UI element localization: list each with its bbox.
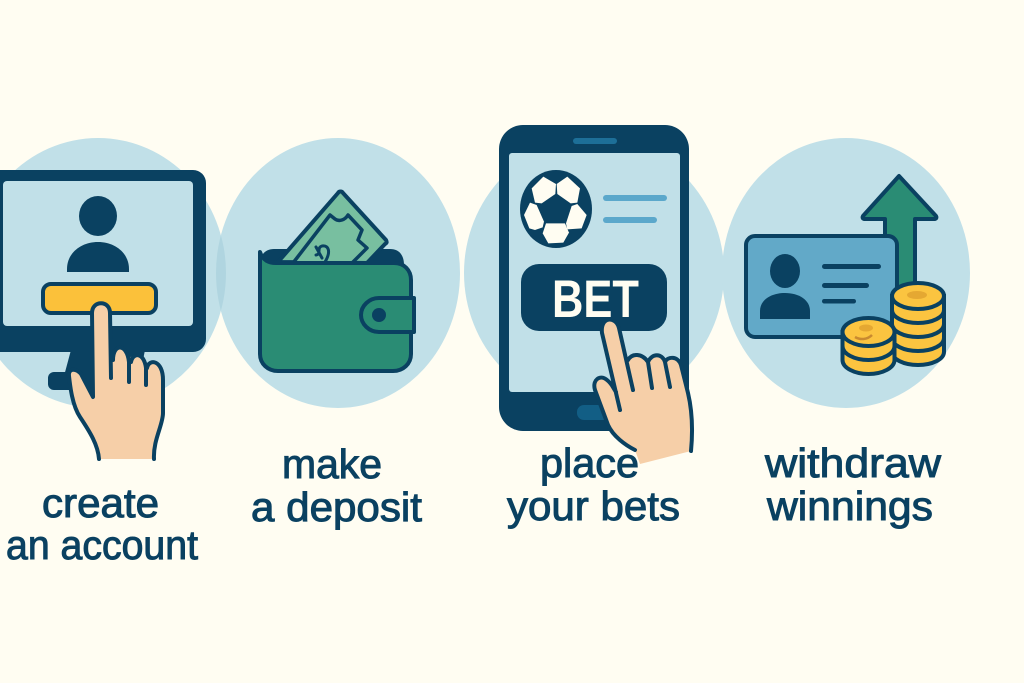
info lines: [603, 195, 667, 223]
panel: make a deposit: [216, 138, 460, 530]
label: place your bets: place: [540, 440, 639, 486]
icon: wallet: [260, 192, 414, 371]
background circle: bets: [464, 138, 724, 408]
icon: small coin stack: [842, 318, 894, 374]
label: withdraw winnings: winnings: [766, 483, 933, 529]
circle overlap: [216, 236, 226, 310]
label: place your bets: your bets: [507, 483, 680, 529]
monitor: [0, 170, 206, 398]
ID card: [746, 236, 897, 337]
label: make a deposit: make: [282, 441, 382, 487]
label: create an account: create: [42, 480, 159, 526]
phone: [499, 125, 689, 431]
background circle: deposit: [216, 138, 460, 408]
yellow button: [43, 284, 156, 313]
icon: soccer ball: [520, 170, 592, 248]
label: make a deposit: a deposit: [251, 484, 423, 530]
background circle: account: [0, 138, 226, 408]
BET button: [521, 264, 667, 331]
panel: withdraw winnings: [722, 138, 970, 529]
label: withdraw winnings: withdraw: [764, 440, 941, 486]
panel: place your bets: [464, 125, 724, 529]
icon: user avatar: [67, 196, 129, 272]
icon: pointing hand: [69, 303, 163, 459]
icon: large coin stack: [892, 283, 944, 365]
label: create an account: an account: [6, 522, 199, 568]
icon: up arrow: [863, 176, 936, 289]
panel: create an account: [0, 138, 226, 568]
background circle: winnings: [722, 138, 970, 408]
BET button: BET: [552, 270, 639, 329]
icon: pointing hand: [594, 320, 692, 464]
